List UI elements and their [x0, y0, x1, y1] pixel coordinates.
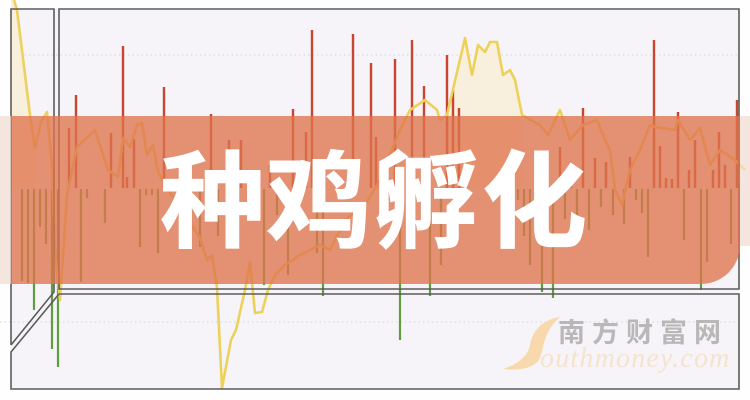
chart: pale area under price line: [11, 0, 522, 188]
watermark: southmoney logo: [503, 317, 731, 374]
watermark chinese name: 南方财富网: [558, 317, 728, 348]
banner: side margins: [0, 116, 750, 284]
banner: [11, 116, 740, 284]
icon: orange swoosh S: [503, 317, 560, 370]
title: 种鸡孵化: [160, 145, 587, 262]
watermark domain: outhmoney.com: [540, 343, 731, 374]
chart: red up bars: [69, 30, 737, 188]
chart: green down bars: [22, 189, 731, 367]
